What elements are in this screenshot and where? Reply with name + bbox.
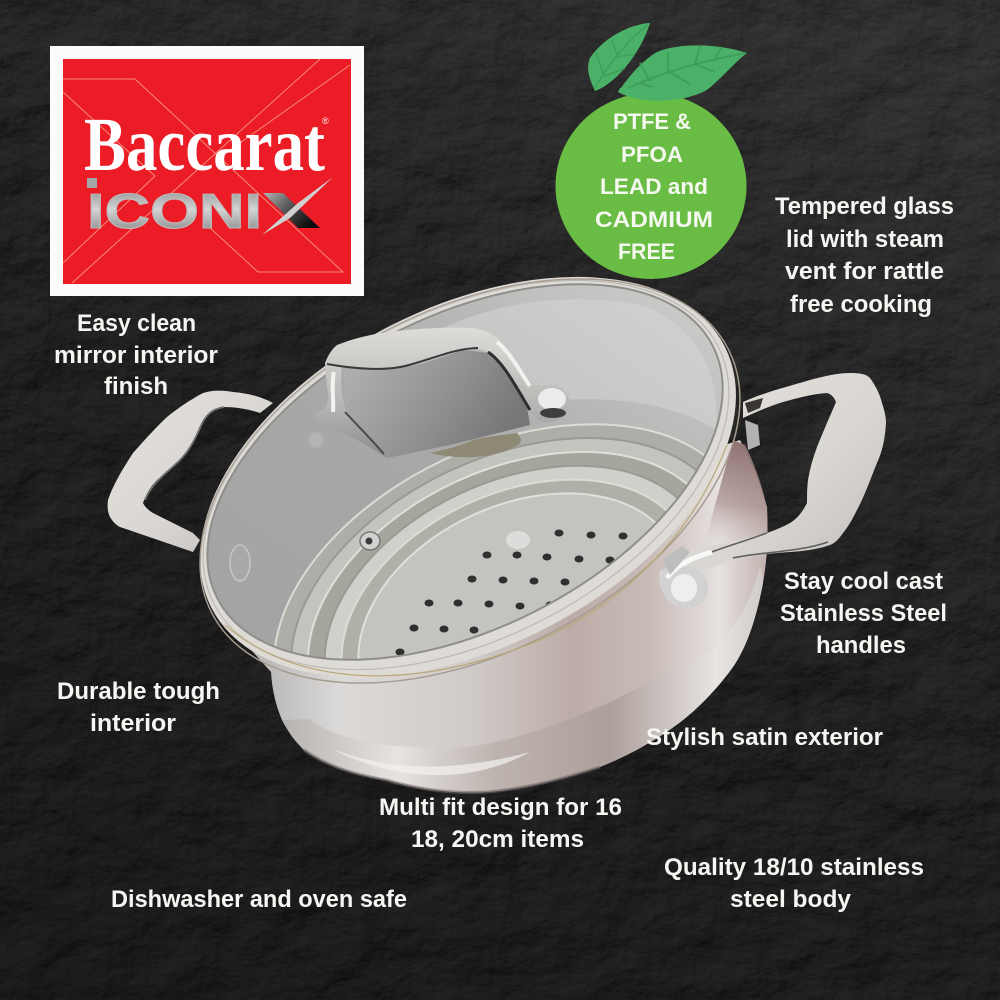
- feature: stay cool handles: [780, 568, 947, 659]
- feature: durable tough interior: interior: [90, 710, 176, 737]
- feature: easy clean mirror interior: Easy clean: [77, 310, 196, 337]
- feature: multi fit design: [379, 794, 622, 853]
- feature: easy clean mirror interior: finish: [104, 373, 168, 400]
- logo: Baccarat Iconix: [50, 46, 364, 296]
- feature: stylish satin exterior: Stylish satin exterior: [646, 724, 883, 751]
- badge text: PFOA: [621, 142, 683, 167]
- feature: stay cool handles: Stay cool cast: [784, 568, 943, 595]
- icon: large leaf: [618, 45, 747, 101]
- feature: quality stainless steel: Quality 18/10 stainless: [664, 854, 924, 881]
- feature: tempered glass lid: free cooking: [790, 291, 932, 318]
- lid knob shadow bubble: [309, 432, 323, 448]
- icon: small leaf: [588, 23, 650, 91]
- feature: tempered glass lid: Tempered glass: [775, 193, 954, 220]
- left handle: [108, 391, 273, 552]
- lid handle knob right: [538, 388, 566, 410]
- feature: multi fit design: 18, 20cm items: [411, 826, 584, 853]
- feature: durable tough interior: [57, 678, 220, 737]
- logo wordmark: iconix: [87, 177, 333, 239]
- feature: quality stainless steel: [664, 854, 924, 913]
- steamer holes: [396, 530, 628, 656]
- badge circle: [556, 93, 746, 279]
- olive lid reflection: [430, 433, 521, 457]
- pot body: [215, 440, 768, 792]
- feature: tempered glass lid: lid with steam: [786, 226, 944, 253]
- steam vent: [360, 532, 380, 550]
- logo: Baccarat Iconix: ®: [322, 116, 329, 126]
- badge text: PTFE &: [613, 109, 691, 134]
- feature: tempered glass lid: [775, 193, 954, 318]
- badge text: FREE: [618, 239, 675, 264]
- feature: tempered glass lid: vent for rattle: [785, 258, 944, 285]
- steamer pot product image: [108, 276, 886, 794]
- handle top and arms: [313, 328, 570, 458]
- pot base band: [282, 567, 763, 792]
- feature: stay cool handles: Stainless Steel: [780, 600, 947, 627]
- gold rim line: [225, 445, 727, 676]
- feature: durable tough interior: Durable tough: [57, 678, 220, 705]
- feature: stay cool handles: handles: [816, 632, 906, 659]
- right handle: [660, 373, 886, 591]
- steamer insert rings: [274, 423, 704, 659]
- feature: easy clean mirror interior: [54, 310, 218, 400]
- feature: multi fit design: Multi fit design for 16: [379, 794, 622, 821]
- feature: dishwasher and oven safe: Dishwasher and oven safe: [111, 886, 407, 913]
- right handle rivet: [659, 566, 708, 609]
- feature: quality stainless steel: steel body: [730, 886, 852, 913]
- pot rim and lid edge: [134, 195, 806, 766]
- glass lid interior: [208, 285, 722, 659]
- badge text: CADMIUM: [595, 207, 713, 232]
- lid handle: [309, 328, 570, 458]
- feature: easy clean mirror interior: mirror interior: [54, 342, 218, 369]
- shaded glass under handle: [343, 350, 530, 458]
- badge text: [595, 109, 713, 264]
- lid upper reflection: [420, 299, 717, 430]
- badge text: LEAD and: [600, 174, 708, 199]
- rosy shading on pot shoulder: [700, 440, 767, 560]
- logo wordmark: iconix: ICONI: [87, 185, 262, 239]
- logo wordmark: Baccarat: Baccarat: [84, 103, 325, 187]
- lid screw: [230, 545, 250, 581]
- badge: PTFE and PFOA free: [556, 23, 747, 279]
- lid glass rim lines: [139, 200, 793, 750]
